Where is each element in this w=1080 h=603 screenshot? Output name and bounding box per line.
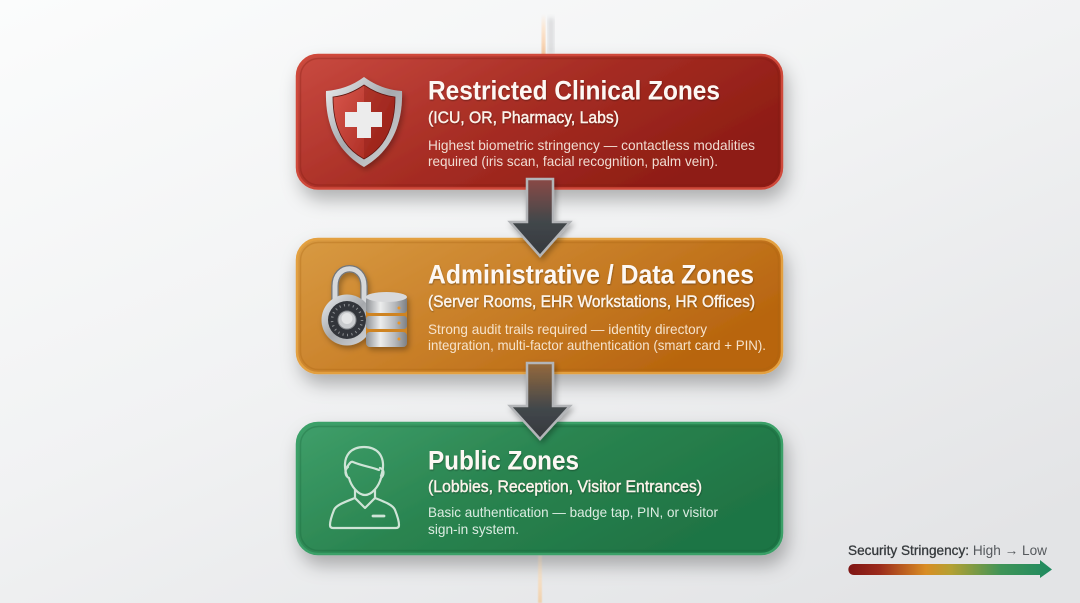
subheading: public areas: (Lobbies, Reception, Visitor Entrances) <box>428 477 702 496</box>
arrow: restricted to administrative <box>510 179 570 256</box>
description: administrative zones: Strong audit trails required — identity directory <box>428 321 707 337</box>
description: public zones: sign-in system. <box>428 521 519 537</box>
description: restricted zones <box>428 137 755 169</box>
heading: public zones: Public Zones <box>428 446 579 476</box>
subheading: restricted areas: (ICU, OR, Pharmacy, Labs) <box>428 108 619 127</box>
description: public zones: Basic authentication — badge tap, PIN, or visitor <box>428 504 718 520</box>
description: restricted zones: Highest biometric stringency — contactless modalities <box>428 137 755 153</box>
legend gradient arrow <box>848 560 1052 578</box>
description: restricted zones: required (iris scan, facial recognition, palm vein). <box>428 153 718 169</box>
heading: administrative / data zones: Administrative / Data Zones <box>428 260 754 290</box>
icon: padlock and database <box>322 269 407 347</box>
description: public zones <box>428 504 718 537</box>
panel: public zones <box>297 423 782 554</box>
panel: administrative / data zones <box>297 239 782 373</box>
legend label: Security Stringency: High → Low <box>848 542 1048 558</box>
icon: person outline <box>330 447 399 528</box>
panel: restricted clinical zones <box>297 55 782 188</box>
arrow: administrative to public <box>510 363 570 439</box>
description: administrative zones <box>428 321 766 353</box>
vertical light line: top <box>542 14 554 55</box>
vertical light line: bottom <box>538 555 542 603</box>
subheading: administrative areas: (Server Rooms, EHR Workstations, HR Offices) <box>428 292 755 311</box>
heading: restricted clinical zones: Restricted Clinical Zones <box>428 76 720 106</box>
icon: shield with cross <box>326 77 402 167</box>
description: administrative zones: integration, multi-factor authentication (smart card + PIN). <box>428 337 766 353</box>
legend: security stringency <box>848 542 1052 578</box>
